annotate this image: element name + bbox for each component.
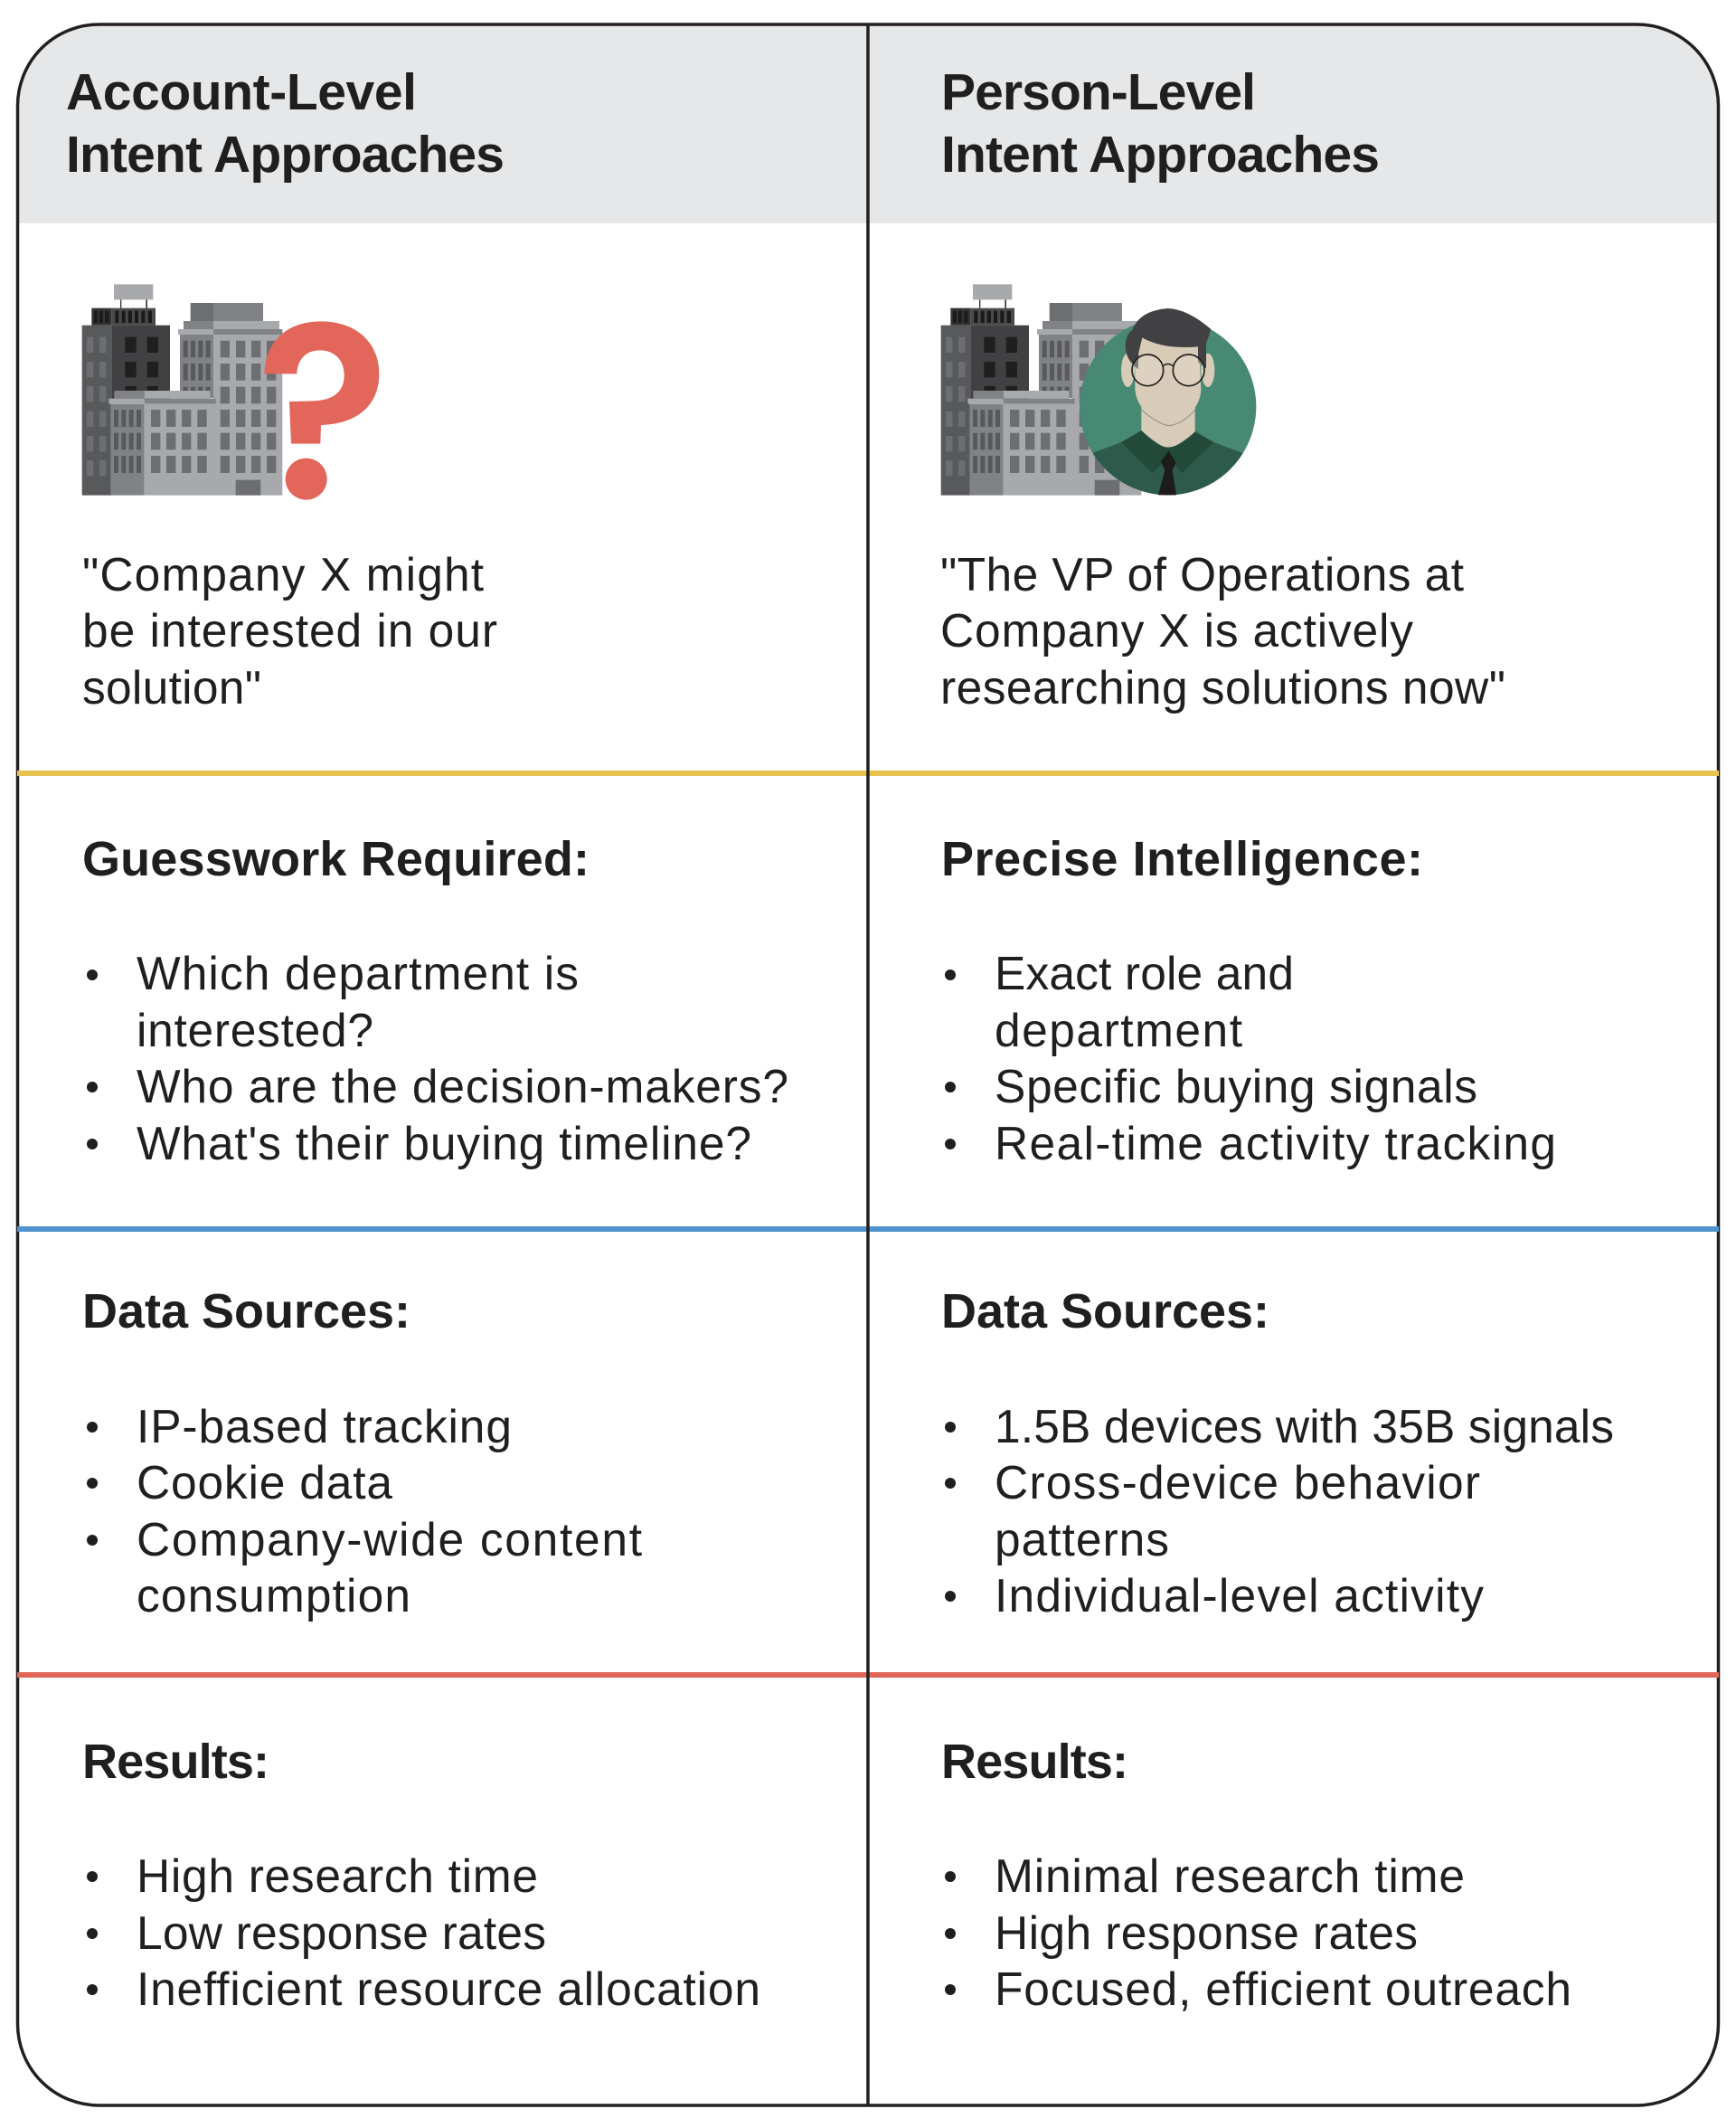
heading: account-level intent approaches: Account-Level <box>66 63 417 121</box>
icon: office buildings with person portrait <box>941 284 1257 504</box>
list: precise intelligence: department <box>995 1004 1242 1056</box>
list: account data sources: Company-wide content <box>137 1513 642 1565</box>
heading: account-level intent approaches: Intent Approaches <box>66 126 505 184</box>
list: person data sources: Individual-level activity <box>995 1569 1484 1622</box>
list: account data sources: IP-based tracking <box>137 1400 512 1452</box>
list: person data sources: patterns <box>995 1513 1169 1565</box>
list: person data sources: 1.5B devices with 35B signals <box>995 1400 1614 1452</box>
list: account results: Low response rates <box>137 1906 546 1959</box>
list: precise intelligence: Exact role and <box>995 947 1294 999</box>
list: person results: Minimal research time <box>995 1849 1465 1902</box>
list: person results: Focused, efficient outreach <box>995 1962 1571 2015</box>
list: guesswork questions: Who are the decision-makers? <box>137 1060 788 1112</box>
list: person results: High response rates <box>995 1906 1418 1959</box>
heading: results (person): Results: <box>941 1735 1128 1789</box>
list: guesswork questions <box>87 947 788 1169</box>
heading: account-level intent approaches <box>66 63 505 184</box>
heading: person-level intent approaches: Person-Level <box>941 63 1256 121</box>
quote: company x might be interested: solution" <box>82 661 261 714</box>
list: account data sources <box>87 1400 642 1622</box>
quote: company x might be interested <box>82 548 497 714</box>
list: person data sources: Cross-device behavior <box>995 1456 1480 1509</box>
heading: person-level intent approaches <box>941 63 1380 184</box>
list: precise intelligence: Real-time activity tracking <box>995 1117 1556 1169</box>
list: precise intelligence <box>945 947 1556 1169</box>
list: account data sources: consumption <box>137 1569 410 1622</box>
heading: person-level intent approaches: Intent Approaches <box>941 126 1380 184</box>
list: guesswork questions: What's their buying timeline? <box>137 1117 751 1169</box>
heading: precise intelligence: Precise Intelligence: <box>941 832 1423 886</box>
panel: person-level column <box>940 63 1614 2015</box>
list: person data sources <box>945 1400 1614 1622</box>
list: precise intelligence: Specific buying signals <box>995 1060 1477 1112</box>
list: account results <box>87 1849 760 2015</box>
quote: company x might be interested: "Company X might <box>82 548 484 601</box>
list: account results: High research time <box>137 1849 538 1902</box>
heading: data sources (person): Data Sources: <box>941 1284 1269 1338</box>
heading: guesswork required: Guesswork Required: <box>82 832 590 886</box>
list: account data sources: Cookie data <box>137 1456 392 1509</box>
list: guesswork questions: Which department is <box>137 947 579 999</box>
quote: vp of operations researching: researching solutions now" <box>940 661 1505 714</box>
heading: results (account): Results: <box>82 1735 269 1789</box>
panel: account-level column <box>66 63 788 2015</box>
heading: data sources (account): Data Sources: <box>82 1284 410 1338</box>
list: guesswork questions: interested? <box>137 1004 373 1056</box>
list: account results: Inefficient resource allocation <box>137 1962 760 2015</box>
quote: vp of operations researching: "The VP of Operations at <box>940 548 1464 601</box>
icon: office buildings with question mark <box>82 284 379 500</box>
list: person results <box>945 1849 1571 2015</box>
quote: vp of operations researching <box>940 548 1505 714</box>
quote: vp of operations researching: Company X is actively <box>940 604 1413 657</box>
quote: company x might be interested: be interested in our <box>82 604 497 657</box>
